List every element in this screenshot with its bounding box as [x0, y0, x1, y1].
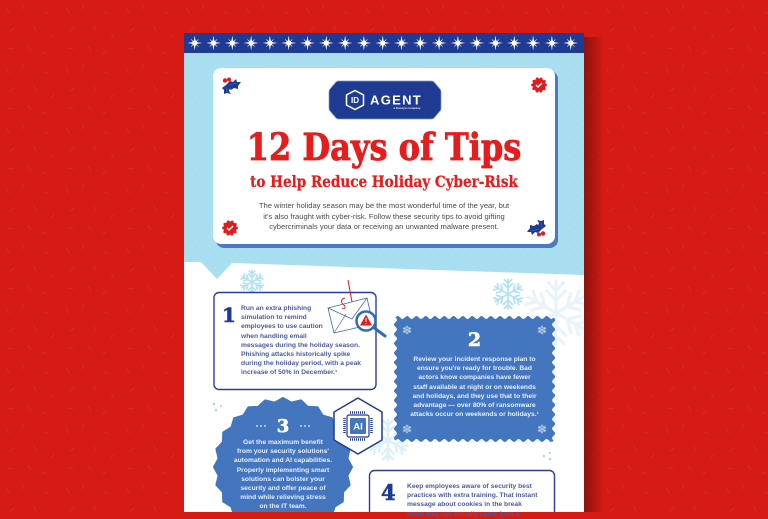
tip 1 text: employees to use caution	[241, 323, 323, 330]
light blue header	[184, 53, 584, 279]
small dots right	[543, 452, 551, 460]
tip 1 box	[214, 292, 376, 390]
tip 3 scalloped circle	[214, 398, 352, 519]
tip 2 text: staff available at night or on weekends	[413, 384, 536, 391]
small dots left	[213, 403, 222, 411]
icon: red check badge top right	[532, 78, 546, 92]
icon: holly top left	[222, 78, 241, 94]
tip 2 text: Review your incident response plan to	[413, 356, 536, 363]
tip 2 text: actors know companies have fewer	[418, 374, 531, 381]
tip 3 text: Properly implementing smart	[237, 467, 329, 474]
tip 2 number: 2	[468, 329, 481, 351]
logo: ID	[351, 96, 359, 105]
tip 1 number: 1	[222, 303, 236, 327]
pale snowflake bottom centre	[368, 420, 408, 460]
icon: envelope with magnifier	[328, 280, 385, 336]
tip 1 text: during the holiday period, with a peak	[241, 360, 361, 367]
page sheet	[184, 33, 584, 512]
logo	[329, 81, 441, 119]
tip 4 text	[407, 483, 538, 518]
snowflake top left	[240, 270, 264, 294]
tip 3 text	[234, 439, 332, 510]
tip 3 text: on the IT team.	[259, 503, 307, 510]
logo: AGENT	[370, 92, 422, 108]
tip 3 dots	[256, 425, 310, 427]
tip 1 text: Run an extra phishing	[241, 305, 311, 312]
AI hexagon icon: AI	[353, 422, 363, 432]
title: 12 Days of Tips	[247, 125, 521, 169]
tip 2 text: ensure you're ready for trouble. Bad	[417, 365, 532, 372]
tip 3 text: Get the maximum benefit	[243, 439, 323, 446]
tip 3 text: mind while relieving stress	[240, 494, 326, 501]
logo: a Kaseya company	[393, 106, 421, 110]
icon: holly bottom right	[527, 220, 546, 236]
intro text: it's also fraught with cyber-risk. Follow these security tips to avoid gifting	[263, 212, 505, 221]
header card	[213, 68, 558, 248]
tip 4 text: room may not actually come from a	[407, 511, 520, 518]
tip 2 corner flakes	[403, 326, 546, 433]
tip 1 text: simulation to remind	[241, 314, 307, 321]
tip 4 text: practices with extra training. That instant	[407, 492, 537, 499]
tip 4 text: message about cookies in the break	[407, 501, 522, 508]
snowflake top right	[493, 279, 523, 309]
tip 3 text: solutions can bolster your	[241, 476, 325, 483]
navy star banner	[184, 33, 584, 53]
tip 1 text	[241, 305, 361, 376]
tip 4 text: Keep employees aware of security best	[407, 483, 532, 490]
tip 3 number: 3	[277, 416, 289, 437]
intro text: The winter holiday season may be the most wonderful time of the year, but	[259, 201, 509, 210]
tip 1 text: Phishing attacks historically spike	[241, 351, 350, 358]
intro text	[259, 201, 510, 231]
tip 3 text: automation and AI capabilities.	[234, 457, 332, 464]
tip 4 box	[370, 470, 554, 519]
tip 2 text	[410, 356, 539, 418]
intro text: cybercriminals your data or receiving an unwanted malware present.	[269, 222, 499, 231]
tip 1 text: when handling email	[241, 333, 307, 340]
AI hexagon icon	[334, 398, 382, 454]
tip 3 text: from your security solutions'	[237, 448, 329, 455]
tip 2 wavy panel	[394, 316, 555, 442]
page-clipped snowflakes	[240, 270, 589, 460]
tip 2 text: advantage — over 80% of ransomware	[413, 402, 536, 409]
tip 1 text: messages during the holiday season.	[241, 342, 360, 349]
tip 1 text: increase of 50% in December.¹	[241, 369, 337, 376]
icon: red check badge bottom left	[223, 221, 237, 235]
subtitle: to Help Reduce Holiday Cyber-Risk	[250, 172, 518, 190]
tip 2 text: attacks occur on weekends or holidays.¹	[410, 411, 539, 418]
large pale snowflake	[523, 281, 589, 345]
tip 4 number: 4	[381, 480, 396, 505]
page shadow	[584, 37, 604, 512]
tip 2 text: and holidays, and they use that to their	[412, 393, 537, 400]
tip 3 text: security and offer peace of	[240, 485, 326, 492]
